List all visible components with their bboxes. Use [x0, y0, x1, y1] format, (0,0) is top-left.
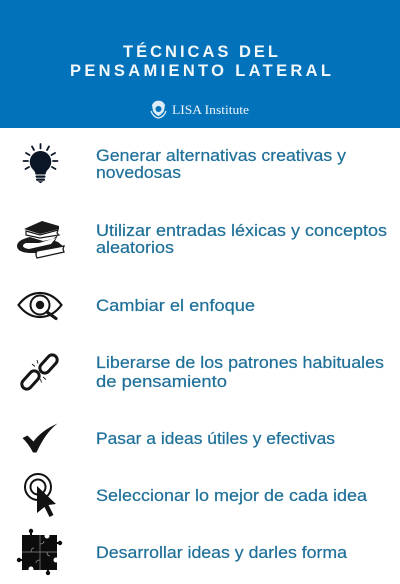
item 4 [20, 353, 384, 391]
icon: light bulb [24, 144, 58, 183]
text: utilizar: aleatorios [96, 239, 174, 257]
text: cambiar: Cambiar el enfoque [96, 297, 255, 315]
title: TÉCNICAS DEL [123, 42, 278, 61]
logo: LISA Institute: LISA Institute [172, 103, 249, 117]
text: seleccionar: Seleccionar lo mejor de cada idea [96, 487, 368, 505]
text: desarrollar: Desarrollar ideas y darles forma [96, 544, 348, 562]
icon: click cursor [25, 474, 56, 517]
logo: LISA Institute [151, 101, 249, 118]
title [70, 42, 331, 80]
item 1 [24, 144, 347, 183]
text: generar: Generar alternativas creativas y [96, 147, 347, 165]
item 6 [25, 474, 368, 517]
item 7 [17, 529, 348, 575]
icon: eye with magnifier [18, 293, 62, 318]
text: generar [96, 147, 347, 182]
item 2 [17, 221, 387, 258]
text: generar: novedosas [96, 164, 181, 182]
item 3 [18, 293, 255, 318]
title: PENSAMIENTO LATERAL [70, 62, 331, 80]
icon: check mark [22, 424, 58, 452]
icon: puzzle [17, 529, 62, 575]
text: liberarse [96, 354, 384, 391]
text: liberarse: de pensamiento [96, 373, 227, 391]
text: liberarse: Liberarse de los patrones habituales [96, 354, 384, 372]
text: utilizar: Utilizar entradas léxicas y conceptos [96, 222, 387, 240]
item 5 [22, 424, 335, 452]
text: pasar: Pasar a ideas útiles y efectivas [96, 430, 335, 448]
header banner [0, 0, 400, 128]
icon: books [17, 221, 64, 258]
text: utilizar [96, 222, 387, 257]
icon: broken chain [20, 353, 59, 391]
